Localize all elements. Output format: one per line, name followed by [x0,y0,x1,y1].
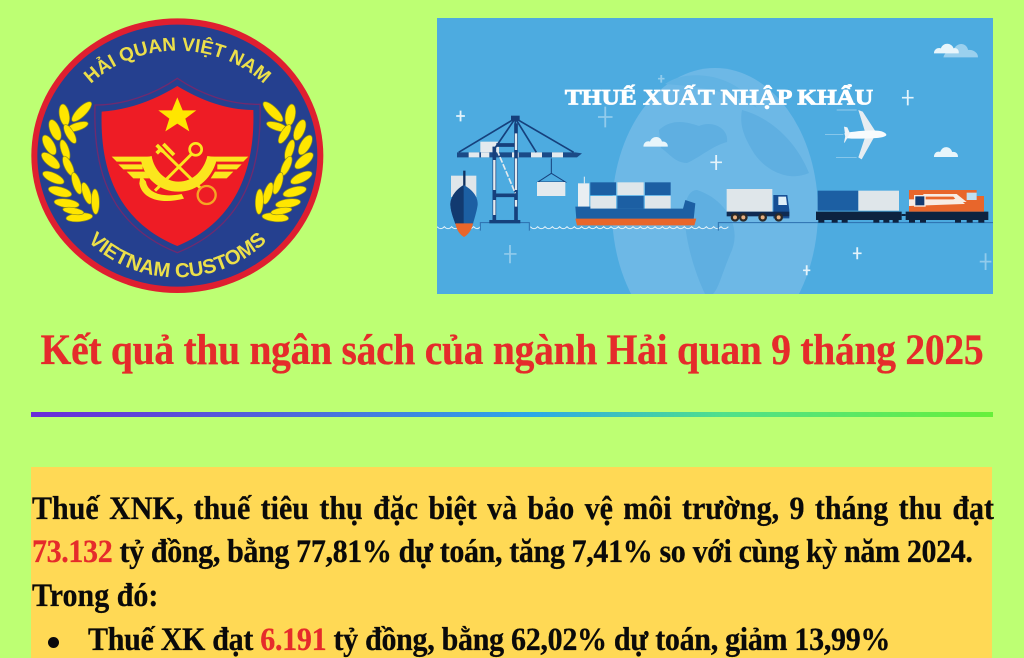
main title: Kết quả thu ngân sách của ngành Hải quan 9 tháng 2025 [41,326,983,374]
container ship [575,177,696,225]
quay [480,223,529,231]
line 1 justified: Thuế XNK, thuế tiêu thụ đặc biệt và bảo vệ môi trường, 9 tháng thu đạt [32,490,994,526]
line 4 export duty: Thuế XK đạt 6.191 tỷ đồng, bằng 62,02% dự toán, giảm 13,99% [88,621,890,657]
blue disc [37,25,317,287]
land line [718,223,995,231]
curved text: VIETNAM CUSTOMS: VIETNAM CUSTOMS [92,230,265,278]
emblem: wings, keys and anchor [112,143,248,204]
sparkles [456,75,991,275]
gold star [158,97,196,131]
globe [612,68,818,354]
clouds [643,44,978,157]
bullet marker [48,637,59,648]
shield outline [95,78,260,253]
small ship [450,171,478,237]
logo: Vietnam Customs emblem [31,18,324,293]
left laurel [39,99,100,223]
right half scene: plane and land transport [718,110,995,231]
line 2 with total figure: 73.132 tỷ đồng, bằng 77,81% dự toán, tăng 7,41% so với cùng kỳ năm 2024. [32,534,973,570]
freight train [816,190,988,223]
banner: import-export tax illustration [437,18,993,294]
gradient divider [31,412,993,417]
banner title: THUẾ XUẤT NHẬP KHẨU [565,84,873,110]
right laurel [255,99,316,223]
left half scene: port and ships [437,116,728,237]
panel: budget summary [31,467,992,658]
red shield [102,86,253,246]
line 3: Trong đó: [32,578,158,614]
outer red ring [31,18,323,293]
airplane [825,110,886,159]
truck [727,189,789,222]
waves [437,227,728,229]
body text: budget results [32,490,994,658]
harbour crane [457,116,582,223]
curved text: HẢI QUAN VIỆT NAM: HẢI QUAN VIỆT NAM [83,37,272,84]
